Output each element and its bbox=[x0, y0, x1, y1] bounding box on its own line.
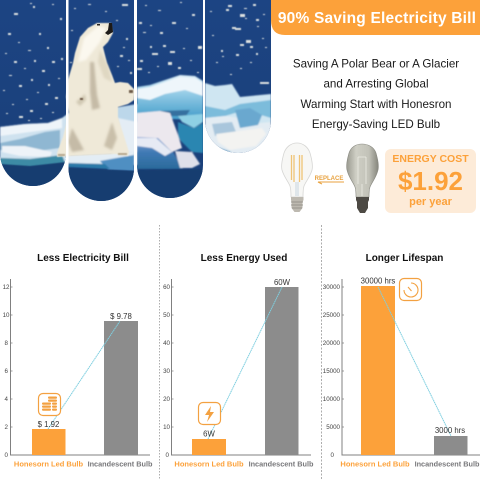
bar: led bbox=[192, 439, 226, 455]
LED stem bbox=[295, 182, 299, 196]
energy cost panel bbox=[385, 149, 476, 213]
axis labels: 0 bbox=[331, 452, 335, 459]
ice cyan facet bbox=[178, 114, 203, 128]
chart: less energy used bbox=[163, 253, 314, 468]
replace arrow bbox=[318, 182, 344, 184]
ice lower blue bbox=[137, 136, 183, 169]
bear paw pads bbox=[80, 90, 133, 100]
LED filaments bbox=[292, 155, 302, 182]
banner title: 90% Saving Electricity Bill bbox=[278, 10, 476, 27]
floe lower bbox=[68, 163, 110, 169]
ice bright right strip bbox=[216, 128, 266, 150]
LED filament bulb bbox=[282, 143, 312, 212]
icon: coins bbox=[38, 394, 60, 416]
energy cost value: $1.92 bbox=[398, 166, 463, 196]
axis labels bbox=[3, 284, 10, 459]
dark water below ice bbox=[0, 162, 204, 205]
axis labels: 6 bbox=[5, 368, 9, 375]
icon: lightning bolt bbox=[198, 402, 220, 424]
ice shade left bbox=[0, 130, 60, 152]
axis labels: 25000 bbox=[323, 312, 341, 319]
bolt bbox=[205, 406, 214, 422]
axis labels: 30000 bbox=[323, 284, 341, 291]
axis labels: 20000 bbox=[323, 340, 341, 347]
bear fur shading bbox=[68, 26, 117, 152]
LED base bbox=[291, 197, 304, 212]
replace arrow label: REPLACE bbox=[315, 176, 343, 182]
icon: timer bbox=[400, 278, 422, 300]
axes bbox=[172, 279, 311, 455]
category incandescent: Incandescent Bulb bbox=[88, 460, 153, 468]
axis labels: 40 bbox=[163, 340, 171, 347]
ice blue band right strip bbox=[205, 100, 271, 118]
panel: polar bear photo strips bbox=[0, 0, 272, 205]
paragraph text: Warming Start with Honesron bbox=[300, 98, 452, 111]
tick marks bbox=[172, 287, 174, 427]
ice top left bbox=[0, 118, 62, 136]
ice shade bottom right strip bbox=[218, 146, 232, 152]
value incandescent: 60W bbox=[274, 278, 291, 287]
axis labels: 10 bbox=[3, 312, 10, 319]
axis labels: 60 bbox=[163, 284, 171, 291]
chart title: Less Electricity Bill bbox=[37, 253, 129, 264]
sea background bbox=[0, 0, 272, 202]
ice right strip base bbox=[205, 82, 271, 124]
bar: led bbox=[32, 429, 66, 455]
paragraph text: Energy-Saving LED Bulb bbox=[312, 118, 440, 131]
ice teal crevice bbox=[178, 122, 203, 153]
value led: $ 1.92 bbox=[38, 420, 59, 429]
ice mottled mass right strip bbox=[205, 116, 270, 153]
ice third strip upper bbox=[137, 75, 203, 120]
tick marks bbox=[10, 287, 12, 427]
bear arm crease bbox=[76, 94, 86, 106]
bear belly shade left bbox=[68, 128, 84, 152]
axis labels bbox=[163, 284, 171, 459]
paragraph text bbox=[293, 58, 459, 131]
bear belly shade right bbox=[104, 122, 117, 150]
axis labels: 12 bbox=[3, 284, 10, 291]
category led: Honesorn Led Bulb bbox=[174, 460, 244, 468]
category incandescent: Incandescent Bulb bbox=[415, 460, 480, 468]
ice blue patch right strip bbox=[235, 108, 262, 128]
value incandescent: $ 9.78 bbox=[110, 312, 132, 321]
bear chest shade bbox=[90, 62, 100, 110]
divider right bbox=[320, 225, 322, 480]
axis labels: 10 bbox=[163, 424, 171, 431]
trend line bbox=[48, 321, 120, 429]
floe shade bbox=[100, 155, 134, 171]
axis labels: 2 bbox=[5, 424, 9, 431]
trend line bbox=[208, 287, 282, 439]
ice white mass center bbox=[137, 111, 182, 152]
bear body bbox=[57, 23, 135, 157]
value incandescent: 3000 hrs bbox=[435, 426, 465, 435]
axis labels: 20 bbox=[163, 396, 171, 403]
chart title: Less Energy Used bbox=[201, 253, 287, 264]
floe under bear bbox=[68, 152, 134, 164]
coin stacks bbox=[42, 396, 57, 411]
chart: less electricity bill bbox=[3, 253, 153, 468]
ice dark ledge bbox=[160, 110, 190, 116]
bear eye bbox=[97, 24, 100, 26]
category led: Honesorn Led Bulb bbox=[340, 460, 410, 468]
ice blob lower bbox=[137, 138, 172, 156]
timer dial bbox=[404, 283, 418, 297]
axis labels: 8 bbox=[5, 340, 9, 347]
incandescent bulb bbox=[347, 144, 378, 213]
ice behind bear bbox=[117, 103, 138, 166]
ice lump lower right bbox=[175, 151, 200, 168]
polar bear bbox=[57, 23, 135, 157]
LED base thread bbox=[291, 202, 303, 208]
ice white behind bear bbox=[118, 118, 137, 152]
water sparkles bbox=[3, 2, 269, 121]
trend line bbox=[378, 287, 451, 436]
axis labels: 4 bbox=[5, 396, 9, 403]
bar: incandescent bbox=[434, 436, 468, 455]
axis labels: 15000 bbox=[323, 368, 341, 375]
axis labels: 30 bbox=[163, 368, 171, 375]
divider left bbox=[158, 225, 160, 480]
bear nose bbox=[105, 23, 113, 35]
chart title: Longer Lifespan bbox=[366, 253, 443, 264]
banner bbox=[271, 0, 480, 35]
axis labels: 10000 bbox=[323, 396, 341, 403]
incandescent filament bbox=[358, 157, 366, 196]
glacier ice bbox=[0, 75, 271, 171]
chart: longer lifespan bbox=[323, 253, 480, 468]
bear feet bbox=[58, 153, 127, 156]
category led: Honesorn Led Bulb bbox=[14, 460, 83, 468]
axis labels: 0 bbox=[166, 452, 170, 459]
category incandescent: Incandescent Bulb bbox=[249, 460, 314, 468]
axis labels: 5000 bbox=[326, 424, 341, 431]
value led: 30000 hrs bbox=[361, 276, 395, 286]
incandescent base bbox=[356, 197, 369, 213]
value led: 6W bbox=[203, 430, 215, 438]
tick marks bbox=[342, 287, 344, 427]
axis labels bbox=[323, 284, 341, 459]
ice gray right strip bbox=[212, 122, 236, 136]
bear head highlight bbox=[78, 26, 106, 62]
axis labels: 50 bbox=[163, 312, 171, 319]
axis labels: 0 bbox=[5, 452, 9, 459]
bar: incandescent bbox=[104, 321, 138, 455]
bar: incandescent bbox=[265, 287, 298, 455]
paragraph text: Saving A Polar Bear or A Glacier bbox=[293, 58, 459, 70]
bear neck shade bbox=[98, 52, 112, 81]
ice teal lower left bbox=[0, 155, 66, 168]
paragraph text: and Arresting Global bbox=[323, 78, 429, 90]
axes bbox=[10, 279, 150, 455]
energy cost label: ENERGY COST bbox=[392, 153, 469, 165]
ice ridge third strip bbox=[137, 77, 203, 100]
ice base left bbox=[0, 112, 70, 165]
ice white left bbox=[2, 146, 52, 157]
energy cost unit: per year bbox=[409, 196, 453, 208]
bar: led bbox=[361, 286, 395, 455]
axes bbox=[342, 279, 480, 455]
